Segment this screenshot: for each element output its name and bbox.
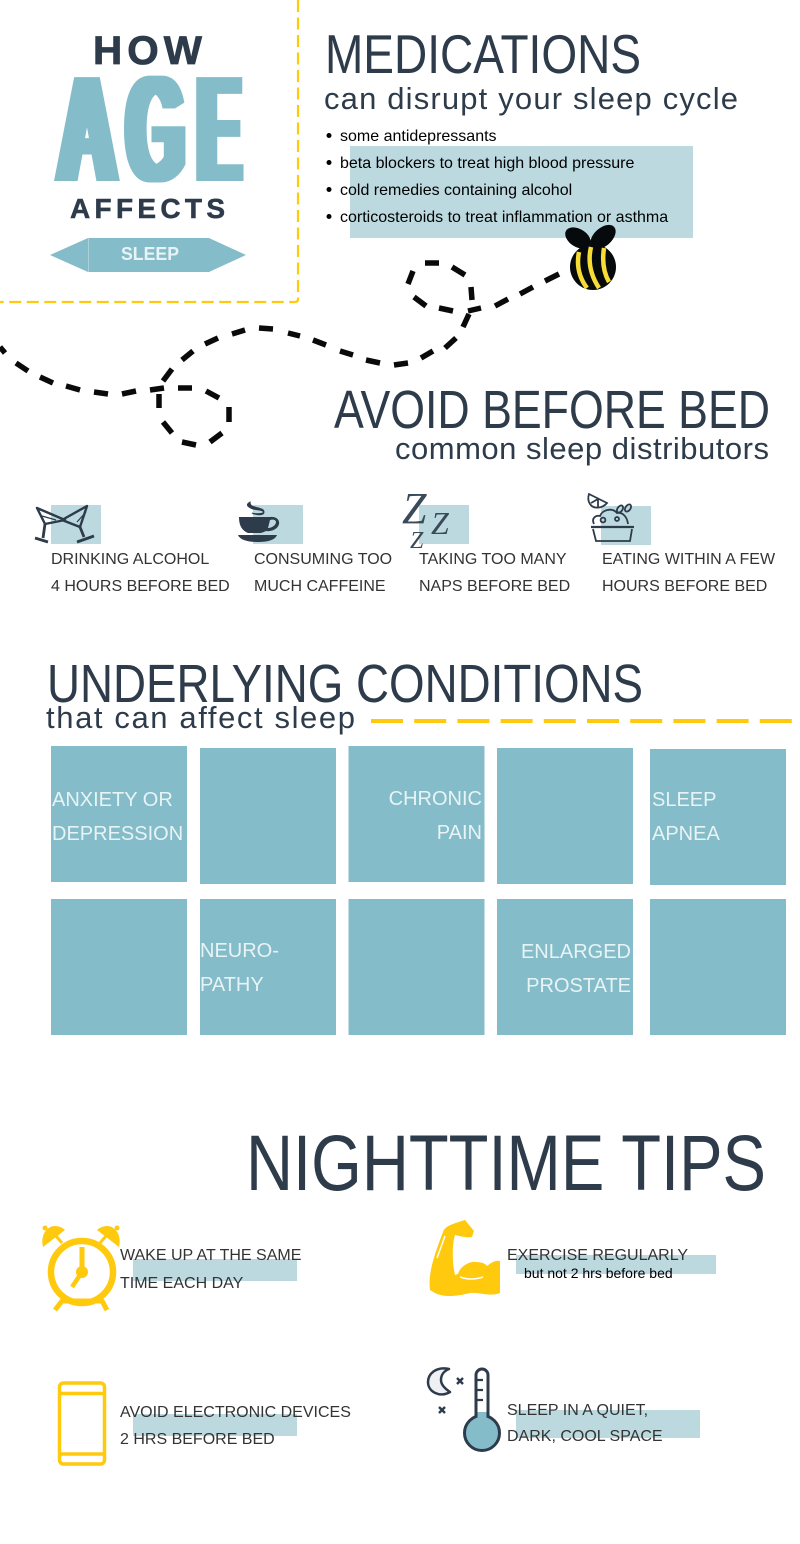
- tip: sleep space: SLEEP IN A QUIET,: [507, 1402, 648, 1419]
- title: AFFECTS: AFFECTS: [70, 193, 225, 224]
- panel: conditions grid: APNEA: [652, 823, 720, 845]
- icon: sleeping Zs: Z: [402, 484, 427, 533]
- icon: moon and thermometer: [428, 1368, 500, 1450]
- tip: sleep space: DARK, COOL SPACE: [507, 1428, 663, 1445]
- icon: clinking glasses: [35, 506, 94, 542]
- ribbon: SLEEP: SLEEP: [121, 244, 179, 264]
- item: caffeine: [238, 502, 392, 595]
- panel: conditions grid: DEPRESSION: [52, 823, 183, 845]
- item: alcohol: 4 HOURS BEFORE BED: [51, 578, 230, 595]
- panel: medications: [324, 23, 738, 238]
- heading: underlying conditions: UNDERLYING CONDITIONS: [47, 654, 643, 714]
- icon: sleeping Zs: Z: [431, 505, 450, 541]
- highlight block: [350, 146, 693, 238]
- tip: wake up: [42, 1226, 301, 1310]
- dashed bee flight path: [0, 263, 559, 445]
- medication list: some antidepressants: [340, 128, 497, 145]
- panel: conditions grid: CHRONIC: [389, 788, 482, 810]
- item: naps: NAPS BEFORE BED: [419, 578, 570, 595]
- item: naps: [402, 484, 570, 595]
- panel: conditions grid: SLEEP: [652, 789, 716, 811]
- item: alcohol: [35, 505, 230, 595]
- item: caffeine: CONSUMING TOO: [254, 551, 392, 568]
- icon: sleeping Zs: [402, 484, 450, 554]
- panel: conditions grid: ANXIETY OR: [52, 789, 173, 811]
- title: AGE: A: [58, 44, 116, 213]
- panel: conditions grid: PAIN: [437, 822, 482, 844]
- tip: devices: 2 HRS BEFORE BED: [120, 1431, 275, 1448]
- item: alcohol: DRINKING ALCOHOL: [51, 551, 209, 568]
- icon: alarm clock: [42, 1226, 120, 1310]
- icon: sleeping Zs: Z: [410, 528, 424, 554]
- title: AGE: G: [127, 44, 184, 213]
- subheading: medications: can disrupt your sleep cycle: [324, 81, 738, 116]
- item: caffeine: MUCH CAFFEINE: [254, 578, 386, 595]
- tip: exercise: [430, 1220, 716, 1296]
- title: HOW: HOW: [93, 29, 207, 73]
- tip: exercise: EXERCISE REGULARLY: [507, 1247, 688, 1264]
- item: eating: EATING WITHIN A FEW: [602, 551, 776, 568]
- panel: conditions grid: ENLARGED: [521, 941, 631, 963]
- icon: bee: [561, 220, 620, 290]
- panel: conditions grid: [51, 746, 786, 1035]
- tip: wake up: TIME EACH DAY: [120, 1275, 244, 1292]
- panel: conditions grid: PROSTATE: [526, 975, 631, 997]
- item: naps: TAKING TOO MANY: [419, 551, 567, 568]
- tip: devices: [60, 1383, 351, 1464]
- subheading: that can affect sleep: that can affect sleep: [46, 700, 355, 735]
- tip: sleep space: [428, 1368, 700, 1450]
- heading: medications: MEDICATIONS: [325, 23, 641, 85]
- icon: flexed arm: [430, 1220, 500, 1296]
- panel: conditions grid: PATHY: [200, 974, 264, 996]
- icon: coffee cup: [238, 502, 279, 542]
- medication list: [326, 128, 668, 226]
- medication list: beta blockers to treat high blood pressure: [340, 155, 634, 172]
- panel: title block: [0, 0, 298, 302]
- ribbon: SLEEP: [50, 238, 246, 272]
- tip: exercise: but not 2 hrs before bed: [524, 1265, 673, 1281]
- subheading: common sleep distributors: common sleep distributors: [395, 431, 769, 466]
- item: eating: [588, 494, 776, 595]
- tip: devices: AVOID ELECTRONIC DEVICES: [120, 1404, 351, 1421]
- item: eating: HOURS BEFORE BED: [602, 578, 767, 595]
- panel: conditions grid: NEURO-: [200, 940, 279, 962]
- icon: phone: [60, 1383, 104, 1464]
- medication list: cold remedies containing alcohol: [340, 182, 572, 199]
- panel: title block: E: [198, 44, 240, 213]
- medication list: corticosteroids to treat inflammation or asthma: [340, 209, 668, 226]
- icon: food bowl: [588, 494, 634, 541]
- tip: wake up: WAKE UP AT THE SAME: [120, 1247, 301, 1264]
